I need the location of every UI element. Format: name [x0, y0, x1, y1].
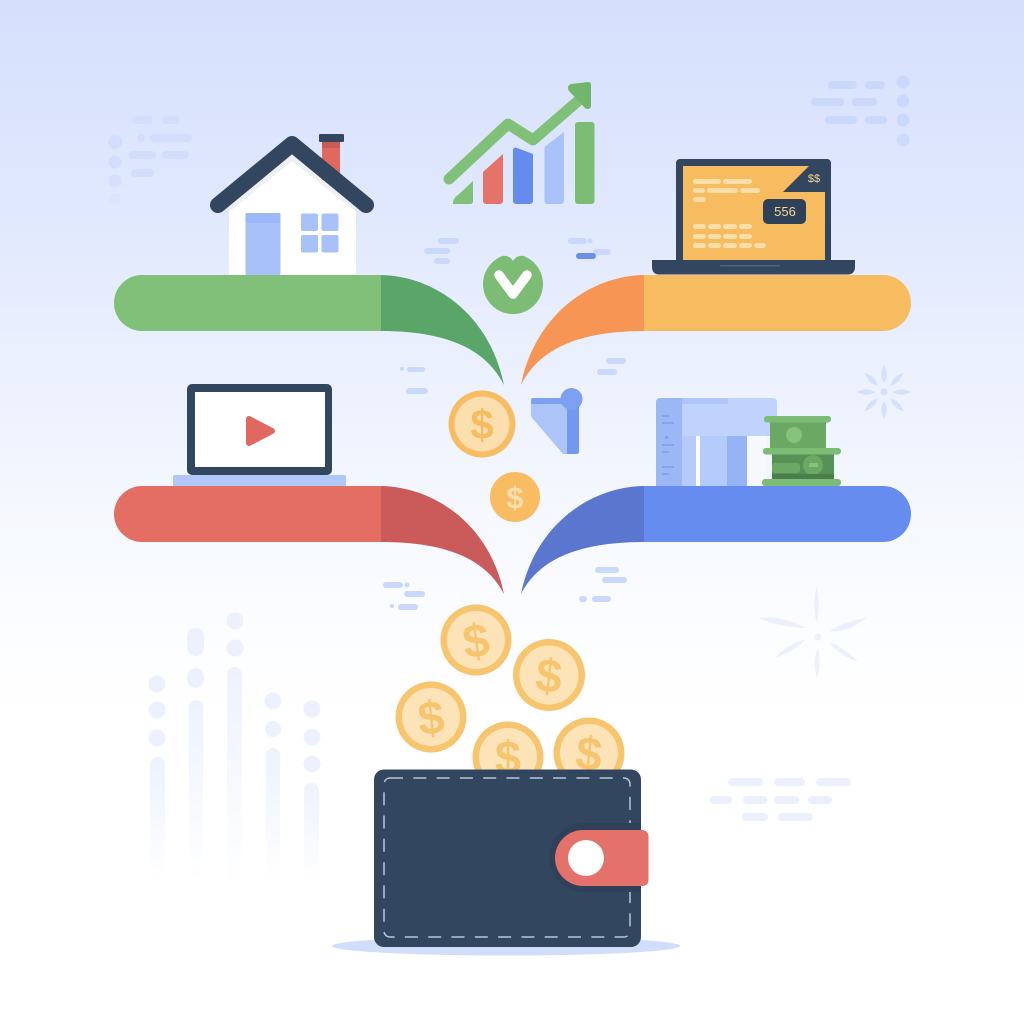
coin: entering wallet right — [554, 718, 624, 788]
icon: building and banknotes — [656, 398, 841, 486]
ribbon: blue — [521, 486, 911, 594]
ribbon: orange — [521, 275, 911, 385]
icon: video laptop — [173, 384, 346, 487]
coin: falling one: $ — [459, 612, 493, 669]
coin: falling three — [396, 682, 466, 752]
label: small amount: $$ — [808, 173, 820, 185]
label: amount: 556 — [774, 204, 796, 219]
coin: entering wallet left: $ — [495, 731, 521, 784]
icon: growth chart — [449, 82, 594, 204]
wallet shadow — [332, 936, 680, 956]
coin: falling one — [440, 604, 512, 676]
decoration: lower-left bars and dots — [148, 612, 320, 885]
icon: laptop with bill — [652, 159, 855, 274]
wallet clasp — [555, 830, 648, 886]
coin: small — [490, 472, 540, 522]
decoration: small blue dash — [576, 253, 596, 259]
coin: entering wallet left — [472, 722, 544, 792]
coin: upper — [448, 390, 516, 458]
icon: funnel — [531, 388, 582, 454]
coin: falling two: $ — [533, 648, 565, 703]
coin: upper: $ — [470, 401, 494, 448]
decoration: small dashes around centre — [383, 238, 627, 610]
coin: falling three: $ — [415, 690, 447, 745]
decoration: top-left dashes and dots — [108, 116, 192, 205]
decoration: top-right dashes and dots — [811, 76, 910, 146]
decoration: upper sparkle — [857, 365, 911, 419]
ribbon: green — [114, 275, 504, 385]
wallet — [374, 770, 648, 947]
decoration: lower-right dashes — [710, 778, 851, 821]
ribbon: red — [114, 486, 504, 594]
badge: heart with check — [483, 256, 543, 314]
coin: small: $ — [506, 480, 524, 515]
coin: entering wallet right: $ — [573, 726, 605, 781]
icon: house — [218, 134, 366, 275]
decoration: lower sparkle — [758, 586, 867, 678]
coin: falling two — [513, 639, 585, 711]
